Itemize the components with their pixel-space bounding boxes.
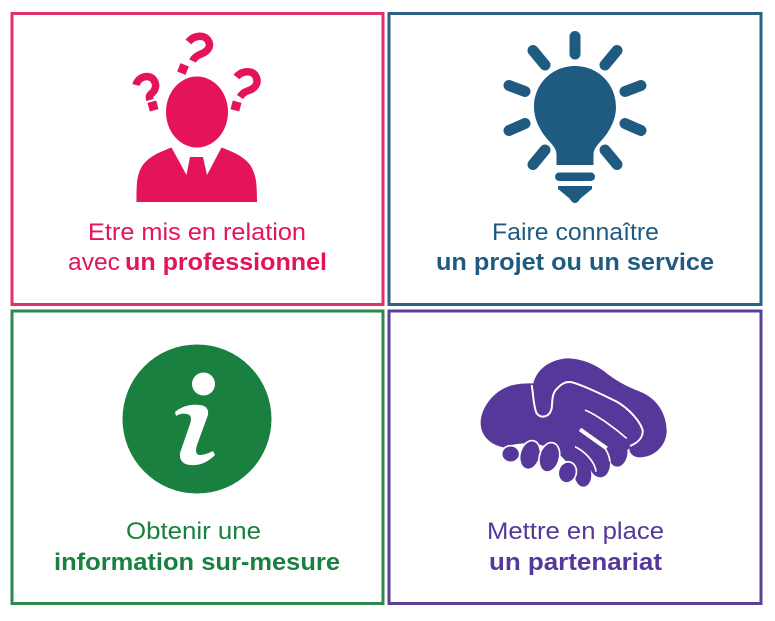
caption: project: Faire connaître: [492, 219, 659, 246]
panel border: information: [12, 311, 383, 604]
panel border: professional: [12, 14, 383, 304]
caption: professional: [68, 219, 327, 276]
panel: information: [12, 311, 383, 604]
panel: project: [389, 14, 761, 304]
panel: partnership: [389, 311, 761, 604]
icon: light bulb: [509, 36, 641, 203]
icon: information circle: [122, 344, 272, 494]
caption: information: information sur-mesure: [54, 549, 340, 576]
caption: information: [54, 518, 340, 576]
caption: professional: Etre mis en relation: [88, 219, 306, 246]
caption: project: [436, 219, 714, 276]
caption: professional: avec: [68, 249, 120, 276]
caption: partnership: un partenariat: [489, 549, 662, 576]
caption: information: Obtenir une: [126, 518, 261, 545]
caption: project: un projet ou un service: [436, 249, 714, 276]
caption: partnership: Mettre en place: [487, 518, 664, 545]
panel border: partnership: [389, 311, 761, 604]
icon: handshake: [481, 358, 667, 487]
panel border: project: [389, 14, 761, 304]
panel: professional: [12, 14, 383, 304]
caption: partnership: [487, 518, 664, 576]
icon: person with question marks: [136, 36, 257, 202]
caption: professional: un professionnel: [125, 249, 327, 276]
